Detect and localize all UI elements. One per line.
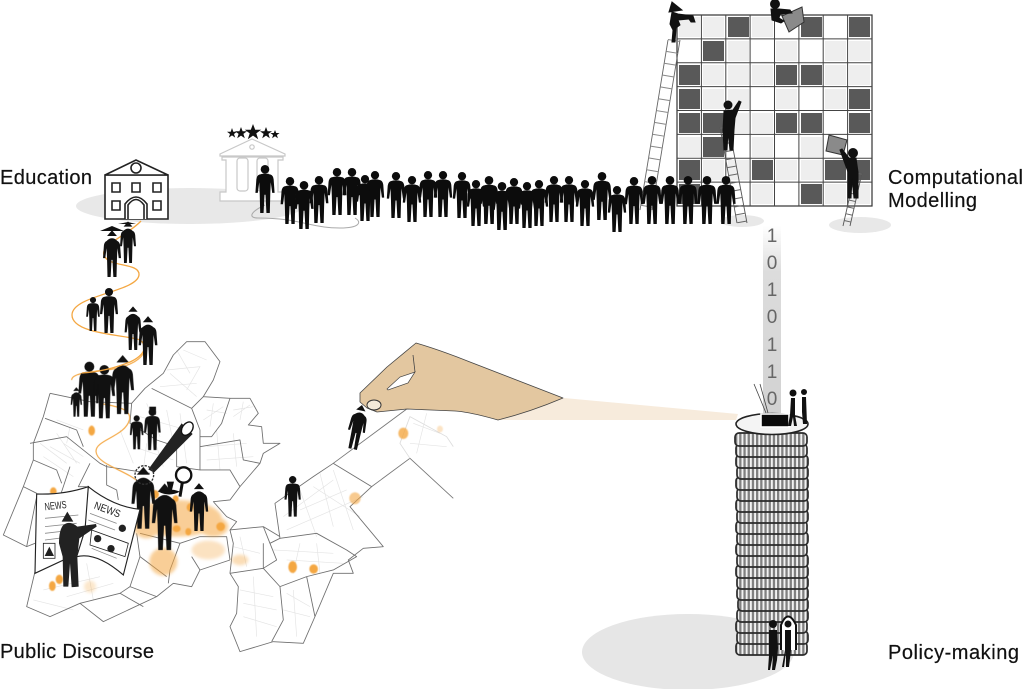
map boundaries xyxy=(3,342,383,652)
thumbnail xyxy=(367,400,381,410)
queue of people xyxy=(255,165,736,232)
icon: top hat xyxy=(158,482,180,494)
light beam from wrist to tower xyxy=(498,398,738,420)
NEWS headline left: NEWS xyxy=(44,499,67,513)
newspaper lines and images xyxy=(43,513,128,558)
builder placing tile xyxy=(770,0,804,32)
binary digits: 1 xyxy=(767,226,777,247)
doorway arch xyxy=(781,616,796,650)
group of people in map xyxy=(71,355,301,550)
map of public discourse xyxy=(3,342,453,652)
binary digits: 1 xyxy=(767,280,777,301)
binary digits: 1 xyxy=(767,362,777,383)
icon: telescope xyxy=(135,420,196,484)
binary digits: 0 xyxy=(767,253,777,274)
dark grey cells xyxy=(679,17,870,204)
gap between finger and thumb xyxy=(387,372,415,390)
label: Education: Education xyxy=(0,167,92,189)
label: Policy-making: Policy-making xyxy=(888,642,1019,664)
antenna lines xyxy=(754,384,768,413)
orange path from school down xyxy=(72,221,144,373)
binary digits: 0 xyxy=(767,307,777,328)
five stars xyxy=(227,124,280,139)
icon: magnifying glass xyxy=(176,467,191,497)
binary data column xyxy=(763,225,781,413)
label: Modelling: Modelling xyxy=(888,190,977,212)
ground shadow: computational modelling xyxy=(829,217,891,233)
builder reaching on ladder xyxy=(723,101,741,150)
builder holding tile xyxy=(826,135,858,198)
top coin xyxy=(736,414,808,434)
builder on ladder top xyxy=(669,2,695,42)
people at tower base xyxy=(768,620,792,670)
ladder: right xyxy=(843,173,862,226)
orange discourse heat spots xyxy=(49,426,443,593)
grid builders xyxy=(669,0,858,198)
thin queue line xyxy=(252,205,359,228)
label: Computational: Computational xyxy=(888,167,1023,189)
ground shadow: grid ladder xyxy=(720,215,764,227)
grid cell backgrounds xyxy=(677,15,872,206)
people walking up the path xyxy=(86,221,157,365)
person held by hand xyxy=(344,403,370,451)
stacked coins xyxy=(735,433,808,655)
building: school xyxy=(105,160,168,219)
light grey cells xyxy=(679,17,870,204)
person pointing at newspaper xyxy=(59,512,97,587)
grid lines xyxy=(677,15,872,206)
ground shadow: education xyxy=(76,188,304,224)
newspapers xyxy=(35,487,140,587)
left newspaper page xyxy=(35,487,88,573)
modelling grid xyxy=(677,15,872,206)
ladder: left tall xyxy=(640,40,680,210)
building: museum with stars xyxy=(220,124,285,201)
finger crease xyxy=(413,355,415,372)
ground shadow: policy-making xyxy=(582,614,794,689)
label: Public Discourse: Public Discourse xyxy=(0,641,154,663)
ladder: middle xyxy=(720,127,747,223)
binary digits xyxy=(767,226,777,410)
people on top of tower xyxy=(788,389,807,426)
NEWS headline right: NEWS xyxy=(92,500,122,520)
hand xyxy=(360,343,563,420)
orange path across map xyxy=(72,350,145,483)
hand-held strip of map xyxy=(333,407,453,498)
right newspaper page xyxy=(77,487,140,575)
binary digits: 0 xyxy=(767,389,777,410)
binary digits: 1 xyxy=(767,335,777,356)
coin tower xyxy=(735,384,808,670)
street texture xyxy=(33,350,447,637)
screen on tower xyxy=(761,414,789,427)
museum outline xyxy=(220,139,285,201)
